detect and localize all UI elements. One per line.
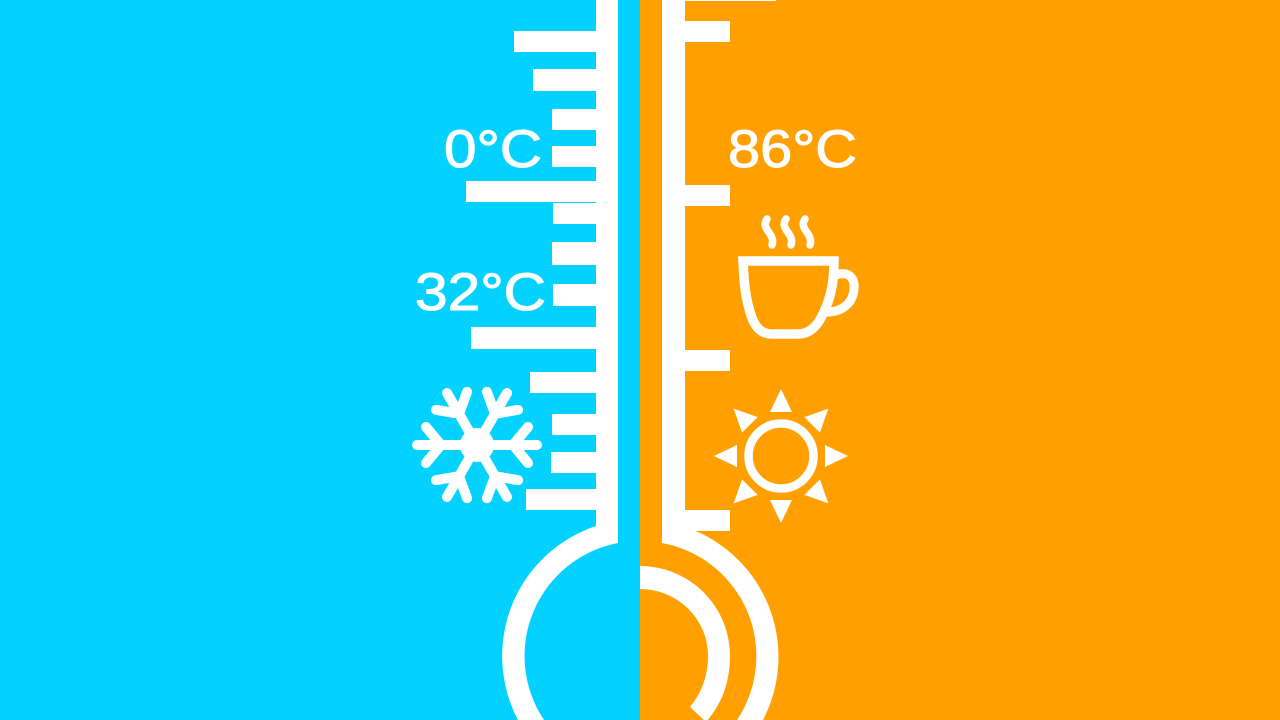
label: 0°C: 0°C — [444, 120, 542, 179]
panel: cold side background — [0, 0, 640, 720]
label: 86°C: 86°C — [728, 120, 857, 179]
panel: hot side background — [640, 0, 1280, 720]
thermometer: hot half mercury arc — [640, 566, 730, 720]
thermometer: cold half bulb outline — [502, 520, 618, 720]
label: 32°C: 32°C — [415, 263, 546, 322]
icon: snowflake — [417, 384, 537, 506]
thermometer: cold half stem and scale ticks — [466, 0, 618, 543]
thermometer: hot half stem and scale ticks — [662, 0, 776, 543]
thermometer: hot half bulb outline — [662, 520, 778, 720]
icon: coffee cup with steam — [743, 219, 854, 334]
icon: sun — [714, 389, 848, 523]
